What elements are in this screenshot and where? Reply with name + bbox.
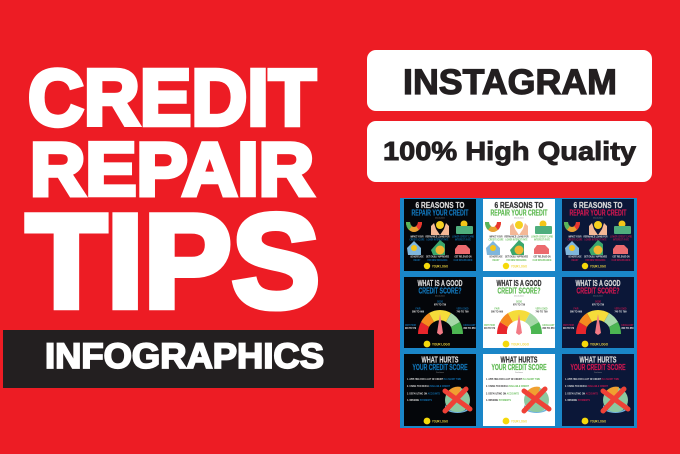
panel: 6 reasons, white and green: IMPACT YOUR: [490, 234, 503, 238]
panel: good credit score gauge, navy and crimson: GOOD: [595, 300, 601, 304]
panel: good credit score gauge, black and blue: 300 TO 579: [405, 326, 416, 330]
panel: 6 reasons, navy and crimson: LOWER INTEREST RATE: [584, 238, 607, 242]
panel: 6 reasons, black and blue: REPAIR YOUR CREDIT: [412, 208, 469, 218]
panel: 6 reasons, white and green: GET RELEASE ON: [534, 254, 551, 258]
panel: what hurts credit score, navy and crimson: [562, 354, 634, 426]
panel: 6 reasons, black and blue: INTEREST RATE: [455, 238, 471, 242]
panel: good credit score gauge, black and blue: VERY POOR: [405, 323, 416, 327]
panel: 6 reasons, navy and crimson: READY: [572, 258, 579, 262]
panel: what hurts credit score, black and blue: [404, 354, 476, 426]
panel: good credit score gauge, white and green: [483, 277, 555, 348]
infographic preview grid: [400, 198, 637, 428]
panel: what hurts credit score, white and green: YOUR CREDIT SCORE: [492, 362, 547, 372]
panel: what hurts credit score, navy and crimson: 4. MISSING PAYMENTS: [565, 398, 590, 402]
title line: CREDIT: CREDIT: [28, 53, 316, 142]
panel: good credit score gauge, black and blue: EXCELLENT: [464, 323, 476, 327]
panel: good credit score gauge, navy and crimson: 580 TO 669: [570, 310, 582, 314]
panel: good credit score gauge, white and green: VERY POOR: [484, 323, 495, 327]
panel: 6 reasons, white and green: LOWER INTEREST RATE: [506, 238, 528, 242]
panel: good credit score gauge, navy and crimson: 670 TO 739: [592, 302, 604, 306]
panel: 6 reasons, navy and crimson: INTEREST RATE: [613, 238, 629, 242]
panel: 6 reasons, black and blue: BE MORTGAGE: [410, 254, 424, 258]
panel: good credit score gauge, white and green: Disclaimer: [514, 296, 524, 298]
panel: what hurts credit score, white and green: 1. APPLYING FOR A LOT OF CREDIT IN A SHORT TIME: [486, 377, 540, 381]
panel: 6 reasons, black and blue: LOWER INTEREST RATE: [426, 238, 449, 242]
panel: 6 reasons, navy and crimson: REPAIR YOUR CREDIT: [570, 208, 627, 218]
panel: 6 reasons, navy and crimson: [562, 199, 634, 271]
panel: good credit score gauge, navy and crimson: 740 TO 799: [614, 310, 627, 314]
panel: good credit score gauge, black and blue: 670 TO 739: [434, 302, 446, 306]
panel: what hurts credit score, navy and crimson: 1. APPLYING FOR A LOT OF CREDIT IN A SHORT TIME: [565, 377, 619, 381]
panel: 6 reasons, navy and crimson: Disclaimer: [593, 218, 603, 220]
panel: what hurts credit score, black and blue: YOUR LOGO: [432, 420, 448, 424]
panel: what hurts credit score, white and green: [483, 354, 555, 426]
panel: 6 reasons, white and green: GET EASILY APPROVED: [505, 254, 528, 258]
panel: 6 reasons, black and blue: GET RELEASE ON: [454, 254, 472, 258]
panel: what hurts credit score, white and green: WHAT HURTS: [500, 354, 538, 364]
panel: 6 reasons, white and green: 6 REASONS TO: [494, 200, 544, 210]
panel: good credit score gauge, white and green: VERY GOOD: [536, 306, 548, 310]
panel: good credit score gauge, white and green: 670 TO 739: [513, 302, 525, 306]
panel: 6 reasons, navy and crimson: BE MORTGAGE: [568, 254, 582, 258]
panel: what hurts credit score, white and green: Disclaimer: [515, 372, 523, 374]
panel: 6 reasons, white and green: CREDIT SCORE: [488, 238, 504, 242]
panel: good credit score gauge, navy and crimson: CREDIT SCORE?: [576, 286, 619, 296]
panel: good credit score gauge, navy and crimson: Disclaimer: [593, 296, 603, 298]
panel: good credit score gauge, black and blue: FAIR: [416, 306, 421, 310]
panel: 6 reasons, white and green: Disclaimer: [514, 218, 524, 220]
panel: good credit score gauge, navy and crimson: YOUR LOGO: [590, 342, 608, 346]
panel: good credit score gauge, navy and crimson: VERY POOR: [563, 323, 574, 327]
panel: 6 reasons, white and green: [483, 199, 555, 271]
panel: good credit score gauge, black and blue: YOUR LOGO: [432, 342, 450, 346]
panel: good credit score gauge, black and blue: VERY GOOD: [456, 306, 469, 310]
panel: 6 reasons, white and green: FOR NEW FINANCING: [506, 258, 526, 262]
panel: 6 reasons, navy and crimson: CREDIT SCORE: [568, 238, 583, 242]
panel: what hurts credit score, navy and crimson: YOUR LOGO: [590, 420, 606, 424]
panel: what hurts credit score, white and green: 4. MISSING PAYMENTS: [486, 398, 511, 402]
panel: what hurts credit score, black and blue: 2. USING TOO MUCH AVAILABLE CREDIT: [407, 384, 450, 388]
panel: 6 reasons, navy and crimson: 6 REASONS TO: [574, 200, 623, 210]
panel: what hurts credit score, navy and crimson: Disclaimer: [594, 372, 602, 374]
panel: good credit score gauge, white and green: EXCELLENT: [542, 323, 555, 327]
panel: what hurts credit score, black and blue: 1. APPLYING FOR A LOT OF CREDIT IN A SHORT TIME: [407, 377, 461, 381]
panel: 6 reasons, black and blue: READY: [414, 258, 421, 262]
panel: 6 reasons, black and blue: CREDIT SCORE: [410, 238, 425, 242]
panel: good credit score gauge, black and blue: [404, 277, 476, 348]
panel: 6 reasons, black and blue: FOR NEW FINANCING: [428, 258, 448, 262]
panel: 6 reasons, navy and crimson: REFINANCE LOANS FOR: [584, 234, 608, 238]
panel: what hurts credit score, black and blue: 4. MISSING PAYMENTS: [407, 398, 432, 402]
panel: 6 reasons, black and blue: YOUR LOGO: [432, 264, 448, 268]
panel: 6 reasons, black and blue: LOWER CREDIT CARD: [452, 234, 474, 238]
panel: 6 reasons, black and blue: REFINANCE LOANS FOR: [426, 234, 450, 238]
panel: good credit score gauge, black and blue: 740 TO 799: [456, 310, 469, 314]
panel: good credit score gauge, white and green: YOUR LOGO: [511, 342, 529, 346]
panel: 6 reasons, navy and crimson: FOR NEW FINANCING: [586, 258, 606, 262]
panel: 6 reasons, navy and crimson: LOWER CREDIT CARD: [610, 234, 632, 238]
panel: good credit score gauge, black and blue: 580 TO 669: [412, 310, 424, 314]
badge: instagram: INSTAGRAM: [403, 63, 617, 102]
panel: what hurts credit score, navy and crimson: 2. USING TOO MUCH AVAILABLE CREDIT: [565, 384, 608, 388]
panel: 6 reasons, navy and crimson: IMPACT YOUR: [568, 234, 582, 238]
title line: REPAIR: REPAIR: [30, 127, 314, 211]
panel: good credit score gauge, black and blue: 800 TO 850: [464, 326, 476, 330]
panel: what hurts credit score, navy and crimson: YOUR CREDIT SCORE: [570, 362, 626, 372]
panel: what hurts credit score, black and blue: 3. DEFAULTING ON ACCOUNTS: [407, 392, 440, 396]
badge: high quality: 100% High Quality: [383, 136, 637, 166]
panel: what hurts credit score, white and green: 3. DEFAULTING ON ACCOUNTS: [486, 392, 519, 396]
panel: what hurts credit score, black and blue: WHAT HURTS: [422, 354, 459, 364]
panel: 6 reasons, white and green: CAR INSURANCE: [532, 258, 552, 262]
panel: good credit score gauge, navy and crimson: EXCELLENT: [622, 323, 634, 327]
panel: what hurts credit score, navy and crimson: 3. DEFAULTING ON ACCOUNTS: [565, 392, 598, 396]
panel: 6 reasons, white and green: READY: [492, 258, 500, 262]
panel: good credit score gauge, white and green: GOOD: [516, 300, 522, 304]
panel: good credit score gauge, navy and crimson: WHAT IS A GOOD: [576, 278, 620, 288]
panel: good credit score gauge, navy and crimson: 300 TO 579: [563, 326, 574, 330]
panel: good credit score gauge, white and green: WHAT IS A GOOD: [496, 278, 542, 288]
banner: infographics: INFOGRAPHICS: [45, 337, 324, 376]
panel: 6 reasons, white and green: YOUR LOGO: [511, 264, 527, 268]
panel: good credit score gauge, black and blue: WHAT IS A GOOD: [418, 278, 462, 288]
panel: good credit score gauge, navy and crimson: FAIR: [574, 306, 579, 310]
panel: good credit score gauge, navy and crimson: [562, 277, 634, 348]
panel: what hurts credit score, white and green: 2. USING TOO MUCH AVAILABLE CREDIT: [486, 384, 529, 388]
panel: good credit score gauge, white and green: 580 TO 669: [491, 310, 503, 314]
panel: good credit score gauge, white and green: CREDIT SCORE?: [498, 286, 540, 296]
panel: 6 reasons, navy and crimson: GET EASILY APPROVED: [584, 254, 607, 258]
panel: good credit score gauge, white and green: FAIR: [494, 306, 500, 310]
title line: TIPS: TIPS: [26, 188, 320, 336]
panel: 6 reasons, black and blue: CAR INSURANCE: [454, 258, 473, 262]
panel: what hurts credit score, white and green: YOUR LOGO: [511, 420, 527, 424]
panel: 6 reasons, navy and crimson: CAR INSURANCE: [612, 258, 631, 262]
panel: good credit score gauge, navy and crimson: 800 TO 850: [622, 326, 634, 330]
panel: good credit score gauge, white and green: 300 TO 579: [484, 326, 495, 330]
badge: instagram: [367, 50, 652, 111]
panel: what hurts credit score, navy and crimson: WHAT HURTS: [580, 354, 617, 364]
panel: 6 reasons, black and blue: 6 REASONS TO: [416, 200, 465, 210]
panel: good credit score gauge, navy and crimson: VERY GOOD: [614, 306, 627, 310]
panel: 6 reasons, white and green: INTEREST RATE: [534, 238, 550, 242]
panel: 6 reasons, white and green: BE MORTGAGE: [490, 254, 503, 258]
banner: infographics: [3, 330, 374, 388]
badge: high quality: [367, 121, 652, 182]
panel: 6 reasons, black and blue: GET EASILY APPROVED: [426, 254, 449, 258]
panel: good credit score gauge, black and blue: GOOD: [437, 300, 443, 304]
panel: good credit score gauge, white and green: 800 TO 850: [542, 326, 555, 330]
panel: 6 reasons, black and blue: Disclaimer: [435, 218, 445, 220]
panel: 6 reasons, white and green: LOWER CREDIT CARD: [531, 234, 553, 238]
panel: good credit score gauge, black and blue: CREDIT SCORE?: [418, 286, 461, 296]
panel: what hurts credit score, black and blue: YOUR CREDIT SCORE: [412, 362, 468, 372]
panel: 6 reasons, black and blue: [404, 199, 476, 271]
panel: good credit score gauge, black and blue: Disclaimer: [435, 296, 445, 298]
title: credit repair tips: [26, 53, 320, 336]
panel: 6 reasons, navy and crimson: YOUR LOGO: [590, 264, 606, 268]
panel: what hurts credit score, black and blue: Disclaimer: [436, 372, 444, 374]
panel: 6 reasons, white and green: REFINANCE LOANS FOR: [504, 234, 529, 238]
panel: 6 reasons, navy and crimson: GET RELEASE ON: [612, 254, 630, 258]
panel: 6 reasons, white and green: REPAIR YOUR CREDIT: [490, 208, 548, 218]
panel: good credit score gauge, white and green: 740 TO 799: [536, 310, 548, 314]
panel: 6 reasons, black and blue: IMPACT YOUR: [410, 234, 424, 238]
